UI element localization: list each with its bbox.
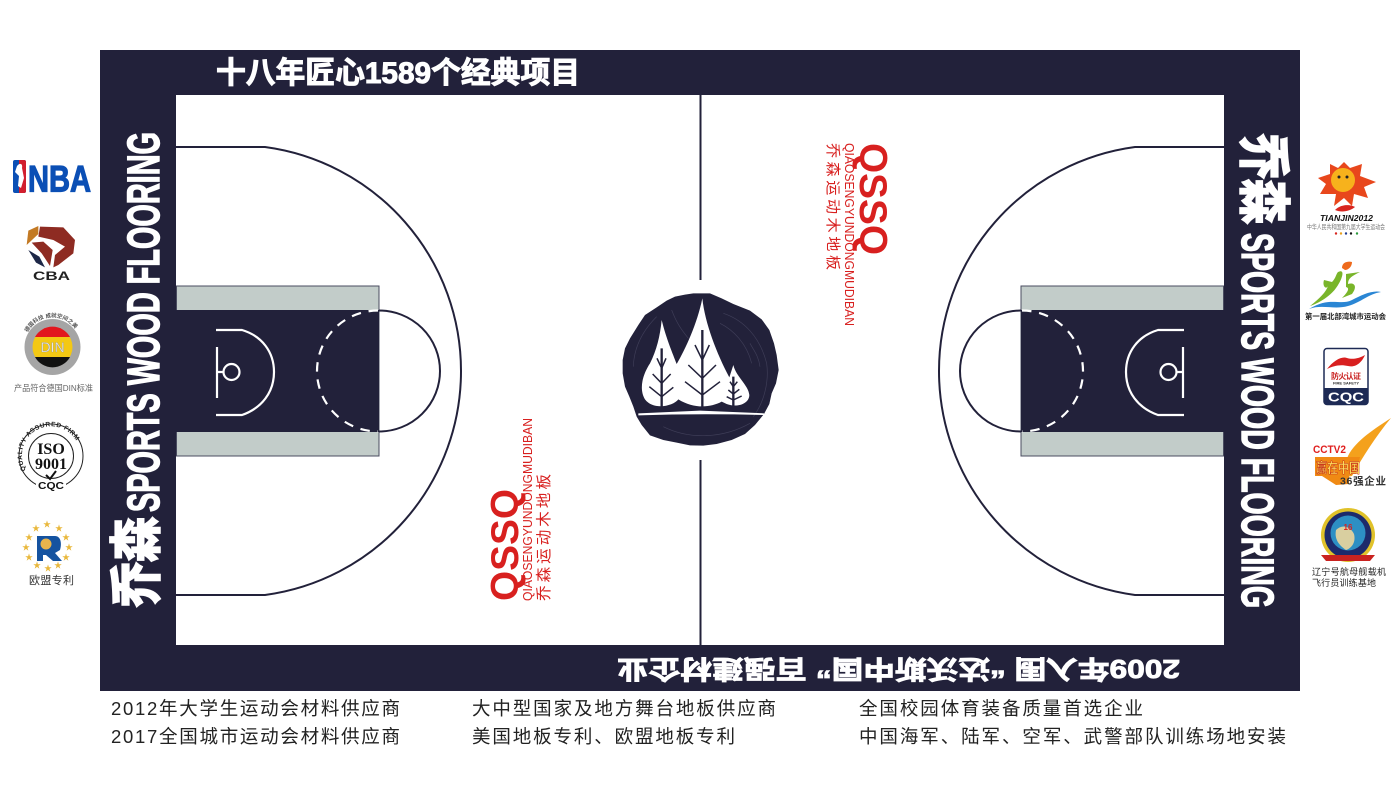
flame streak — [1340, 418, 1391, 478]
court white floor — [176, 95, 1224, 645]
credential column 2 — [472, 698, 776, 747]
ball orange panel — [27, 226, 38, 245]
NBA emblem — [13, 160, 26, 193]
icon: ISO 9001 logo — [18, 422, 84, 492]
icon: EU patent stars: ★ — [54, 561, 62, 570]
pinyin lower: QIAOSENGYUNDONGMUDIBAN — [521, 418, 535, 601]
QSSQ wordmark lower: QSSQ — [484, 489, 527, 601]
logo wood rings — [633, 310, 767, 436]
9001 text: 9001 — [35, 456, 67, 473]
credential column 3: 中国海军、陆军、空军、武警部队训练场地安装 — [859, 726, 1286, 747]
free-throw circle solid right — [960, 310, 1021, 432]
ISO outer ring — [19, 424, 83, 488]
icon: EU patent stars: ★ — [62, 533, 70, 542]
CCTV2 label: CCTV2 — [1313, 444, 1346, 456]
panel: basketball court — [100, 50, 1300, 691]
flame — [1342, 262, 1352, 270]
icon: DIN logo: 德国科技 成就空间之美 — [24, 312, 78, 332]
CBA ball — [27, 226, 75, 267]
free-throw lane right — [1021, 286, 1224, 456]
icon: ISO 9001 logo: QUALITY ASSURED FIRM — [18, 422, 80, 472]
heading: top banner: 十八年匠心1589个经典项目 — [216, 57, 580, 90]
green figure 25 — [1310, 271, 1360, 306]
chinese name lower: 乔森运动木地板 — [535, 474, 553, 601]
badge land — [1336, 527, 1355, 550]
three-point line left — [176, 147, 461, 595]
free-throw circle solid left — [379, 310, 440, 432]
key dark left — [176, 310, 379, 432]
icon: EU patent stars: ★ — [25, 553, 33, 562]
icon: Beibu Gulf games logo — [1309, 262, 1381, 309]
icon: CCTV2 win in China — [1313, 418, 1391, 488]
logo tree silhouettes — [642, 298, 749, 406]
heading: bottom banner upside down: 2009年入围 “达沃斯中国” 百强建材企业 — [617, 655, 1180, 683]
icon: fire safety CQC badge: CQC — [1328, 390, 1365, 404]
panel: right event logos — [1305, 162, 1391, 588]
icon: EU patent stars: ★ — [62, 553, 70, 562]
NBA wordmark: NBA — [28, 158, 91, 200]
sun face — [1331, 168, 1355, 192]
logo wood slice — [623, 293, 779, 446]
icon: navy training base badge — [1321, 508, 1375, 562]
key dark right — [1021, 310, 1224, 432]
icon: EU patent stars: ★ — [65, 543, 73, 552]
ISO ring lettering — [22, 426, 80, 470]
badge sea disc — [1330, 516, 1366, 550]
blue wave — [1309, 292, 1381, 309]
centre line — [700, 95, 702, 645]
36 enterprises label: 36强企业 — [1340, 474, 1386, 488]
icon: fire safety CQC badge — [1324, 348, 1368, 404]
left half court markings — [176, 147, 461, 595]
pinyin upper: QIAOSENGYUNDONGMUDIBAN — [842, 143, 856, 326]
sun rays — [1318, 162, 1376, 206]
badge number: 16 — [1344, 523, 1353, 532]
icon: Tianjin 2012 sun mascot — [1318, 162, 1376, 211]
ISO text: ISO — [37, 441, 65, 458]
left brand chinese: 乔森 — [109, 517, 167, 607]
badge ribbon — [1321, 555, 1375, 561]
free-throw circle dashed right — [1022, 310, 1083, 432]
logo tree branches — [662, 330, 733, 407]
navy caption: 飞行员训练基地 — [1312, 577, 1376, 588]
right side banner — [1232, 134, 1291, 608]
DIN ring — [24, 319, 80, 375]
mascot eyes — [1338, 176, 1340, 178]
brand mark upper right — [824, 143, 894, 326]
text block: bottom credentials — [111, 698, 1286, 747]
credential column 1 — [111, 698, 400, 747]
navy caption — [1312, 566, 1386, 588]
icon: centre tree logo — [623, 293, 779, 446]
icon: NBA logo — [13, 158, 91, 200]
CQC badge — [36, 481, 66, 490]
badge label: 防火认证 — [1331, 371, 1361, 381]
credential column 1: 2017全国城市运动会材料供应商 — [111, 726, 400, 747]
left side banner — [109, 132, 169, 607]
CBA wordmark: CBA — [33, 269, 70, 283]
hoop left — [224, 364, 240, 380]
icon: EU patent stars: ★ — [44, 564, 52, 573]
ball centre panel — [32, 242, 53, 266]
mascot tail — [1335, 205, 1355, 211]
logo ground — [638, 411, 764, 415]
DIN colour bands — [35, 327, 70, 337]
EU patent caption: 欧盟专利 — [29, 573, 74, 587]
badge frame — [1324, 348, 1368, 404]
badge gold ring — [1321, 508, 1375, 562]
panel: left certification logos — [13, 158, 93, 587]
credential column 3: 全国校园体育装备质量首选企业 — [859, 698, 1143, 719]
DIN top caption — [25, 317, 80, 340]
Beibu caption: 第一届北部湾城市运动会 — [1305, 311, 1386, 321]
icon: CCTV2 win in China: 赢在中国 — [1316, 460, 1360, 476]
credential column 1: 2012年大学生运动会材料供应商 — [111, 698, 400, 719]
slogan badge — [1315, 457, 1360, 485]
court dark border — [100, 50, 1300, 691]
badge flag — [1327, 355, 1365, 369]
ball navy panel — [28, 250, 45, 267]
logo small branches — [649, 345, 742, 400]
right brand chinese: 乔森 — [1233, 134, 1291, 224]
icon: EU patent stars — [22, 520, 73, 573]
hoop right — [1160, 364, 1176, 380]
credential column 2: 大中型国家及地方舞台地板供应商 — [472, 698, 776, 719]
right half court markings — [939, 147, 1224, 595]
restricted arc left — [216, 330, 274, 415]
ball red panel — [38, 227, 75, 267]
EU star ring: ★ — [43, 520, 51, 529]
DIN text: DIN — [40, 339, 65, 355]
icon: EU patent stars: ★ — [22, 543, 30, 552]
Tianjin wordmark: TIANJIN2012 — [1320, 213, 1373, 223]
credential column 2: 美国地板专利、欧盟地板专利 — [472, 726, 735, 747]
icon: DIN logo — [24, 312, 80, 375]
free-throw lane left — [176, 286, 379, 456]
icon: EU patent stars: ★ — [33, 561, 41, 570]
EU R mark — [37, 536, 62, 561]
icon: EU patent stars: ★ — [32, 524, 40, 533]
navy caption: 辽宁号航母舰载机 — [1312, 566, 1386, 577]
badge footer — [1324, 388, 1368, 404]
credential column 3 — [859, 698, 1286, 747]
QSSQ wordmark upper: QSSQ — [851, 143, 894, 255]
brand mark lower left — [484, 418, 553, 601]
free-throw circle dashed left — [317, 310, 378, 432]
icon: CBA logo — [27, 226, 75, 283]
Tianjin colour dots — [1335, 232, 1358, 235]
check mark — [46, 471, 56, 479]
chinese name upper: 乔森运动木地板 — [824, 143, 842, 270]
DIN caption: 产品符合德国DIN标准 — [14, 383, 93, 393]
fire safety text: FIRE SAFETY — [1333, 380, 1359, 386]
restricted arc right — [1126, 330, 1184, 415]
icon: EU patent stars: ★ — [55, 524, 63, 533]
icon: EU patent stars: ★ — [25, 533, 33, 542]
icon: ISO 9001 logo: CQC — [38, 481, 64, 492]
three-point line right — [939, 147, 1224, 595]
